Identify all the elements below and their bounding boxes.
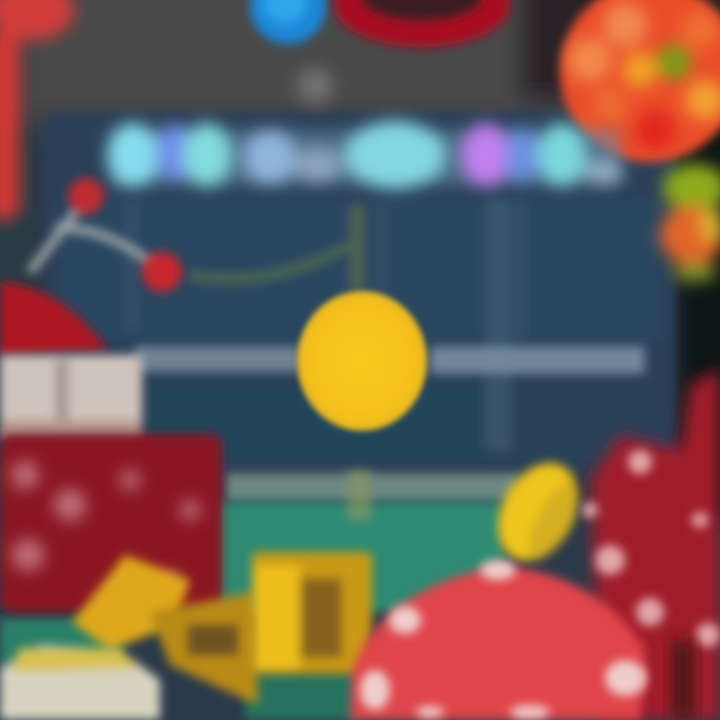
large red chip <box>350 560 645 720</box>
light: blue <box>504 127 540 183</box>
light: purple <box>462 123 510 187</box>
light: blue <box>155 124 195 180</box>
chip top: red dome <box>0 282 108 355</box>
panel: slate board <box>45 112 675 474</box>
gold blocks <box>72 552 372 705</box>
icon: dark red ring <box>334 0 510 47</box>
stack of chips left <box>0 282 222 612</box>
chip stack: red <box>0 434 222 612</box>
chips right <box>582 368 720 720</box>
horizontal bars beside ball <box>135 346 645 374</box>
background: upper wall <box>0 0 720 520</box>
icon: red shape top left <box>0 0 74 220</box>
gold block: middle <box>150 592 258 705</box>
icon: green and yellow garland <box>660 164 720 282</box>
icon: red ball <box>142 252 182 292</box>
string with red balls <box>30 178 182 292</box>
icon: blue ball <box>250 0 326 44</box>
light: pale blue <box>244 129 296 185</box>
panel: light strip below board <box>225 473 520 502</box>
light: pale grey <box>294 147 342 183</box>
lights row <box>107 121 624 189</box>
panel: green table <box>0 470 505 720</box>
light: cyan <box>107 123 159 187</box>
light: bright cyan <box>345 121 445 189</box>
icon: red ball <box>68 178 104 214</box>
chip band: white <box>0 355 142 440</box>
white slab bottom left <box>0 645 160 720</box>
icon: grey dot <box>297 68 333 104</box>
icon: yellow ball <box>297 291 427 431</box>
icon: yellow coin <box>482 449 594 575</box>
light: pale <box>584 158 624 186</box>
light: teal <box>183 123 231 187</box>
icon: flower top right <box>560 0 720 162</box>
light glow band <box>110 130 620 185</box>
gold block: back <box>72 555 190 650</box>
gold block: front <box>252 552 372 674</box>
light: teal <box>538 123 586 187</box>
